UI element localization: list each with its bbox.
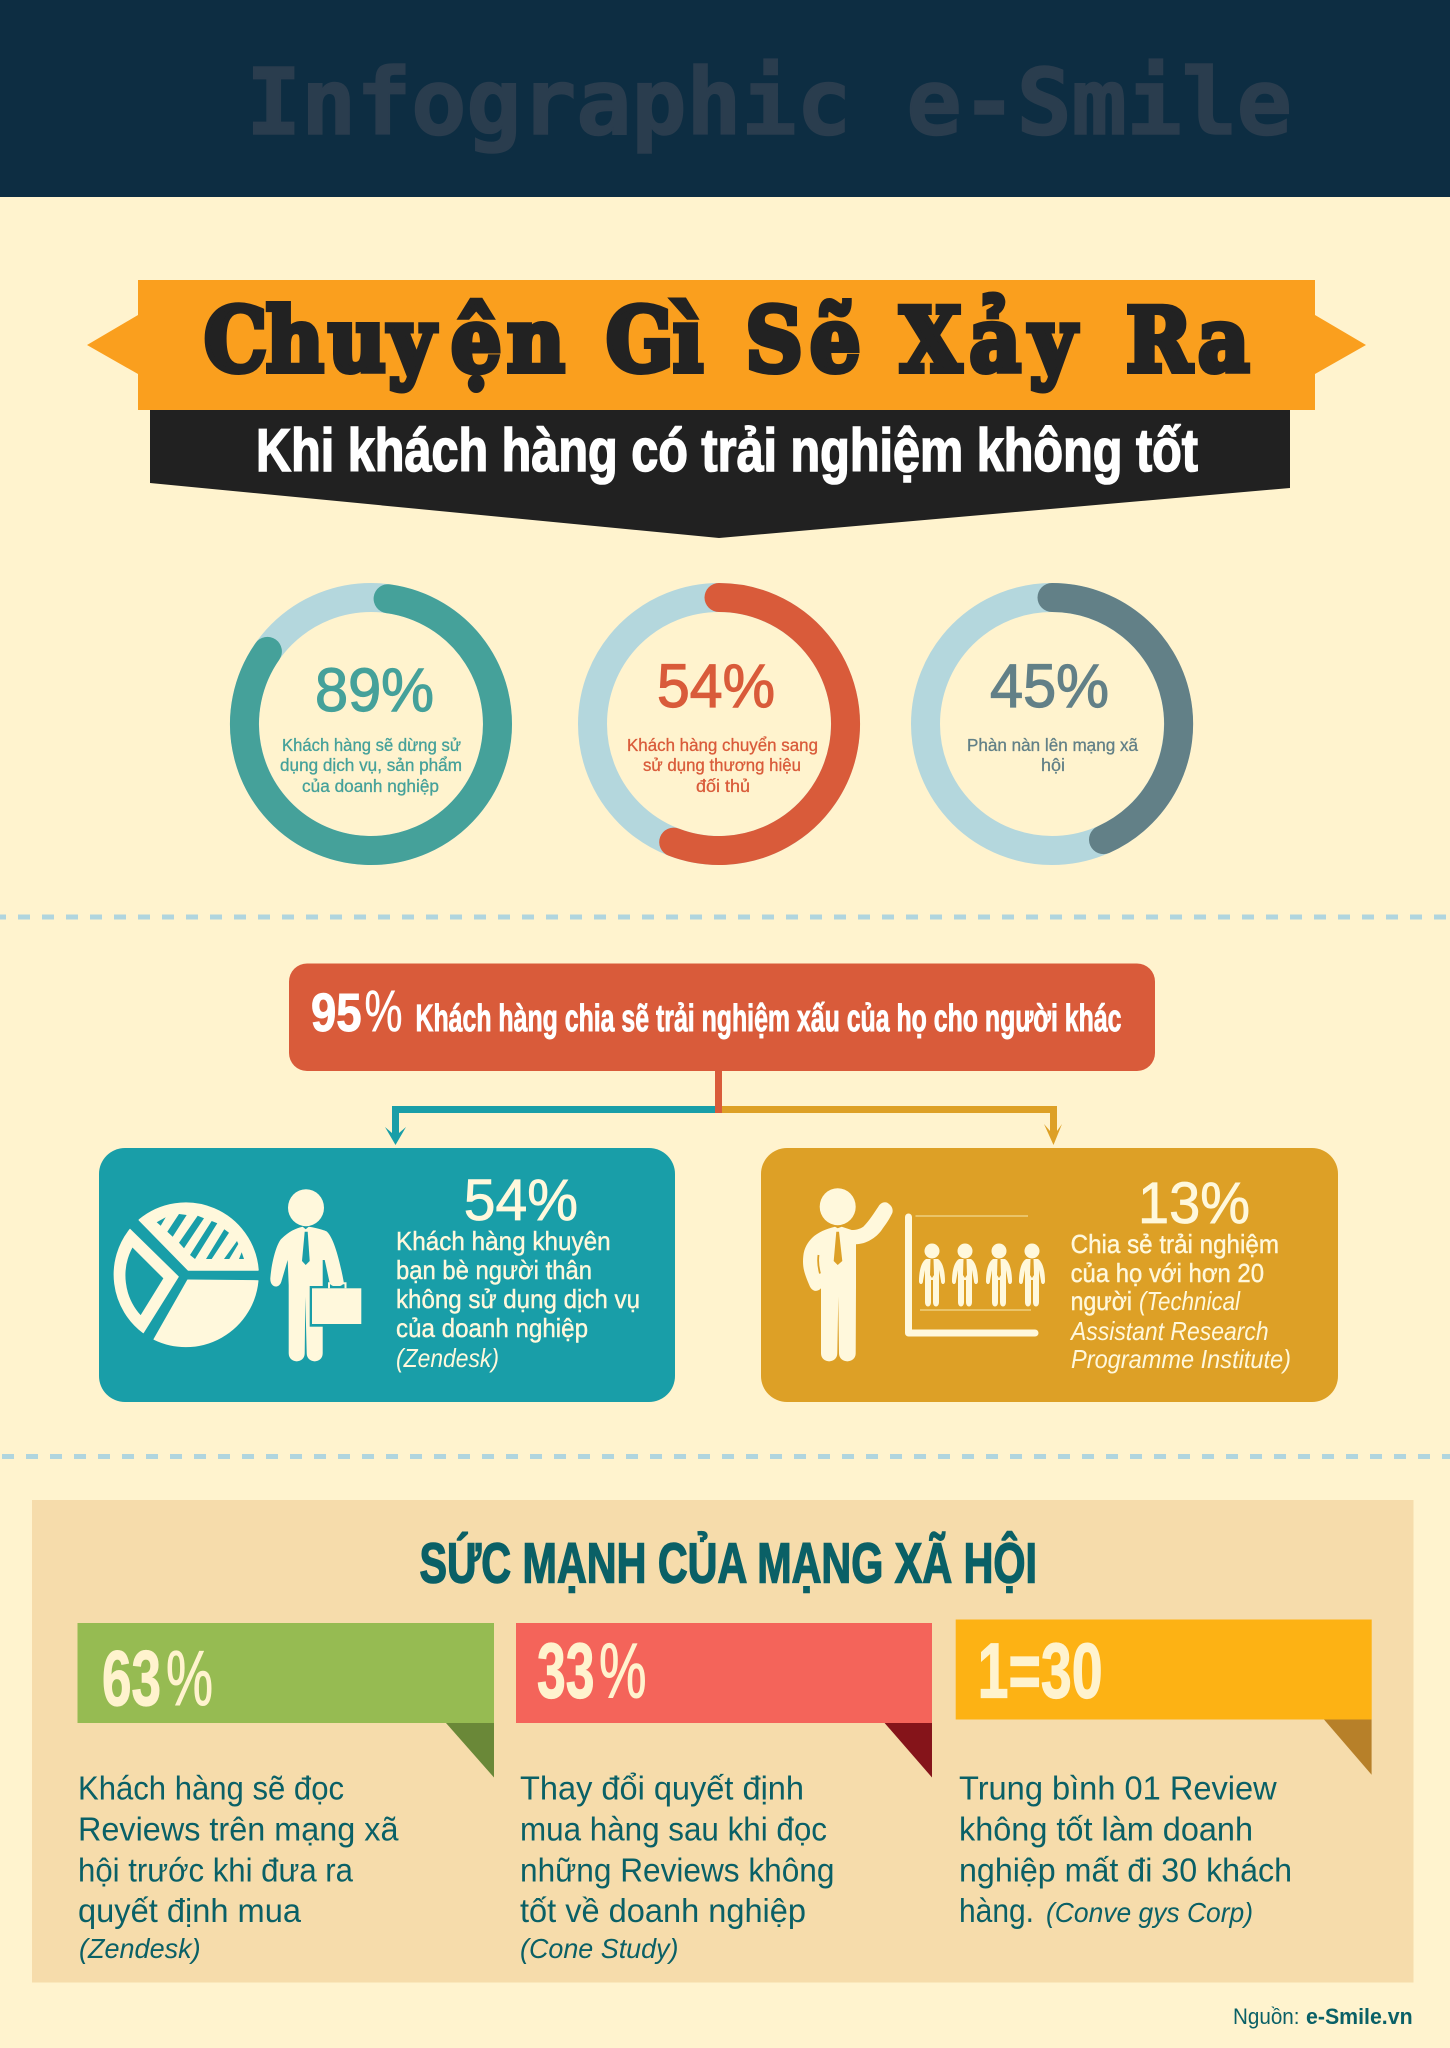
source credit: e-Smile.vn bbox=[1306, 2004, 1413, 2029]
description 89%: của doanh nghiệp bbox=[302, 776, 439, 796]
text: 1=30: (Conve gys Corp) bbox=[1046, 1897, 1253, 1928]
text: 1=30: Trung bình 01 Review bbox=[959, 1770, 1277, 1806]
description 89%: Khách hàng sẽ dừng sử bbox=[282, 735, 461, 755]
panel text bbox=[1069, 1229, 1291, 1374]
icon: presenter bbox=[803, 1188, 893, 1361]
ribbon: 33%: % bbox=[599, 1626, 646, 1714]
stat 13%: 13% bbox=[1138, 1171, 1250, 1236]
ribbon: 63% bbox=[78, 1623, 494, 1778]
text: 33%: những Reviews không bbox=[520, 1852, 834, 1888]
stat 54%: 54% bbox=[657, 652, 775, 720]
text: 1=30: hàng. bbox=[959, 1892, 1034, 1929]
text: 33%: (Cone Study) bbox=[520, 1933, 678, 1964]
panel: teal 54% bbox=[99, 1148, 675, 1402]
text: 33% bbox=[520, 1770, 834, 1964]
text: 33%: tốt về doanh nghiệp bbox=[520, 1892, 806, 1929]
arrow: to gold panel bbox=[719, 1106, 1062, 1145]
icon: board bbox=[908, 1216, 1035, 1333]
panel text: của doanh nghiệp bbox=[396, 1313, 588, 1343]
ribbon: 1=30: 1=30 bbox=[978, 1626, 1103, 1714]
panel text: của họ với hơn 20 bbox=[1071, 1258, 1264, 1288]
text: 63%: hội trước khi đưa ra bbox=[78, 1852, 354, 1888]
description 89% bbox=[280, 735, 462, 796]
ribbon: 1=30 bbox=[956, 1620, 1372, 1775]
ribbon: 63%: 63 bbox=[102, 1634, 161, 1722]
description 45% bbox=[967, 735, 1138, 775]
description 54% bbox=[627, 735, 818, 796]
text: 63%: Khách hàng sẽ đọc bbox=[78, 1770, 344, 1806]
panel text: (Technical bbox=[1139, 1286, 1241, 1316]
panel text: Assistant Research bbox=[1069, 1316, 1269, 1346]
panel text: người bbox=[1071, 1286, 1132, 1316]
donut: 89% bbox=[244, 598, 498, 851]
source credit: Nguồn: bbox=[1233, 2004, 1300, 2029]
text: 63%: Reviews trên mạng xã bbox=[78, 1810, 399, 1848]
text: 33%: mua hàng sau khi đọc bbox=[520, 1810, 827, 1848]
text: 1=30: không tốt làm doanh bbox=[959, 1810, 1253, 1848]
stat 89%: 89% bbox=[315, 656, 434, 724]
description 89%: dụng dịch vụ, sản phẩm bbox=[280, 755, 462, 775]
heading: SỨC MẠNH CỦA MẠNG XÃ HỘI bbox=[420, 1530, 1037, 1596]
header title: Infographic e-Smile bbox=[246, 49, 1292, 156]
text: 63% bbox=[78, 1770, 399, 1964]
panel text: Programme Institute) bbox=[1071, 1344, 1291, 1374]
arrow stem bbox=[715, 1071, 722, 1113]
description 54%: sử dụng thương hiệu bbox=[643, 755, 801, 775]
description 54%: Khách hàng chuyển sang bbox=[627, 735, 818, 755]
donut: 45% bbox=[926, 597, 1179, 850]
text: 63%: quyết định mua bbox=[78, 1892, 302, 1929]
stat 54%: 54% bbox=[464, 1168, 578, 1233]
arrow: to teal panel bbox=[385, 1106, 719, 1145]
stat 95% bbox=[311, 979, 402, 1044]
text: 1=30 bbox=[959, 1770, 1292, 1929]
ribbon: 63%: % bbox=[166, 1634, 213, 1722]
text: 33%: Thay đổi quyết định bbox=[520, 1770, 804, 1806]
panel text: (Zendesk) bbox=[396, 1343, 499, 1373]
panel text: không sử dụng dịch vụ bbox=[396, 1284, 640, 1314]
description 45%: Phàn nàn lên mạng xã bbox=[967, 735, 1138, 755]
stat 45%: 45% bbox=[990, 652, 1109, 720]
description 54%: đối thủ bbox=[696, 776, 750, 796]
panel text: Khách hàng khuyên bbox=[396, 1226, 611, 1256]
icon: audience bbox=[919, 1244, 1045, 1306]
donut: 54% bbox=[592, 598, 846, 850]
subtitle banner bbox=[150, 410, 1290, 538]
ribbon: 33%: 33 bbox=[537, 1626, 594, 1714]
text: 1=30: nghiệp mất đi 30 khách bbox=[959, 1852, 1292, 1888]
description 45%: hội bbox=[1041, 755, 1065, 775]
panel: social media power bbox=[32, 1500, 1414, 1982]
source credit bbox=[1233, 2004, 1413, 2029]
stat 95%: 95 bbox=[311, 983, 362, 1043]
panel text bbox=[396, 1226, 640, 1373]
main title: Chuyện Gì Sẽ Xảy Ra bbox=[204, 288, 1249, 392]
panel: gold 13% bbox=[761, 1148, 1338, 1402]
panel text: bạn bè người thân bbox=[396, 1255, 592, 1285]
ribbon: 33% bbox=[516, 1623, 932, 1778]
title banner bbox=[87, 280, 1366, 410]
icon: businessman with briefcase bbox=[270, 1189, 364, 1361]
subtitle: Khi khách hàng có trải nghiệm không tốt bbox=[256, 417, 1198, 484]
callout: 95% bbox=[289, 964, 1155, 1071]
stat 95%: % bbox=[364, 979, 402, 1044]
icon: pie chart bbox=[114, 1203, 258, 1347]
text: 63%: (Zendesk) bbox=[79, 1933, 201, 1964]
panel text: Chia sẻ trải nghiệm bbox=[1071, 1229, 1279, 1259]
header band bbox=[0, 0, 1450, 197]
